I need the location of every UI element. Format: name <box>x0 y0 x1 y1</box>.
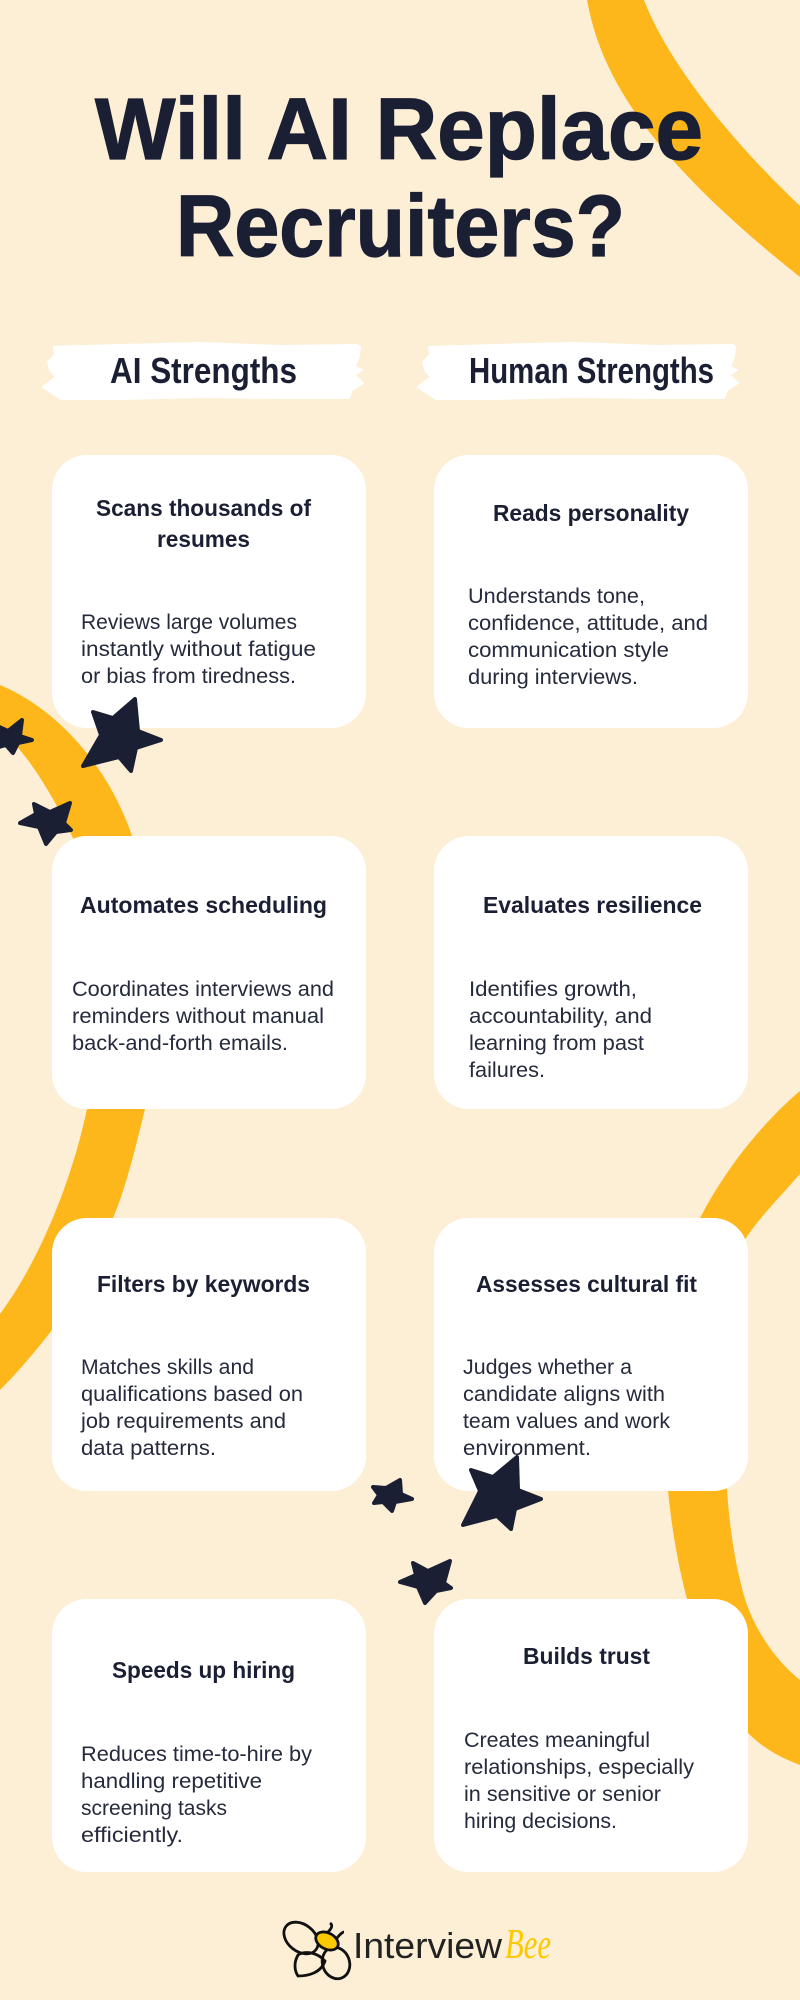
card: Builds trust: Creates meaningful <box>464 1729 650 1752</box>
stars: left group <box>0 699 161 844</box>
card: Filters by keywords: Filters by keywords <box>97 1271 310 1297</box>
card: Reads personality: confidence, attitude, and <box>468 612 708 635</box>
logo: InterviewBee: Bee <box>505 1922 551 1968</box>
card: Evaluates resilience: accountability, and <box>469 1005 652 1028</box>
card: Scans thousands of resumes: Scans thousands of <box>96 495 311 521</box>
card: Assesses cultural fit <box>434 1218 748 1491</box>
card: Scans thousands of resumes: or bias from tiredness. <box>81 665 296 688</box>
title: Will AI Replace <box>95 81 703 178</box>
card: Reads personality: communication style <box>468 639 669 662</box>
card: Filters by keywords <box>52 1218 366 1491</box>
card: Reads personality: Understands tone, <box>468 585 645 608</box>
card: Automates scheduling: back-and-forth emails. <box>72 1032 288 1055</box>
column header: AI Strengths: AI Strengths <box>110 350 297 391</box>
card: Evaluates resilience: Identifies growth, <box>469 978 637 1001</box>
card: Builds trust: relationships, especially <box>464 1756 695 1779</box>
title: Recruiters? <box>176 178 625 275</box>
card: Reads personality: Reads personality <box>493 500 689 526</box>
card: Evaluates resilience: Evaluates resilience <box>483 892 702 918</box>
card: Evaluates resilience: failures. <box>469 1059 545 1082</box>
column header: AI Strengths <box>43 343 363 399</box>
title <box>95 81 703 275</box>
card: Scans thousands of resumes: instantly without fatigue <box>81 638 316 661</box>
card: Builds trust: hiring decisions. <box>464 1810 617 1833</box>
card: Filters by keywords: job requirements and <box>80 1410 286 1433</box>
decorative arc: top right <box>587 0 800 277</box>
card: Assesses cultural fit: Judges whether a <box>463 1356 632 1379</box>
card: Assesses cultural fit: environment. <box>463 1437 591 1460</box>
card: Assesses cultural fit: candidate aligns with <box>463 1383 665 1406</box>
column header: Human Strengths <box>418 343 738 399</box>
card: Assesses cultural fit: Assesses cultural fit <box>476 1271 697 1297</box>
card: Evaluates resilience: learning from past <box>469 1032 644 1055</box>
card: Speeds up hiring <box>52 1599 366 1872</box>
card: Filters by keywords: qualifications based on <box>81 1383 303 1406</box>
decorative arc: left <box>0 685 162 1390</box>
card: Filters by keywords: data patterns. <box>81 1437 216 1460</box>
icon: bee <box>278 1916 354 1983</box>
card: Speeds up hiring: efficiently. <box>81 1824 183 1847</box>
card: Filters by keywords: Matches skills and <box>81 1356 254 1379</box>
card: Speeds up hiring: Reduces time-to-hire by <box>81 1743 313 1766</box>
card: Automates scheduling: reminders without manual <box>72 1005 324 1028</box>
card: Builds trust: in sensitive or senior <box>464 1783 661 1806</box>
logo: InterviewBee: Interview <box>353 1925 503 1966</box>
stars: centre group <box>373 1457 541 1603</box>
column header: Human Strengths: Human Strengths <box>469 350 714 391</box>
card: Automates scheduling: Coordinates interviews and <box>72 978 334 1001</box>
card: Speeds up hiring: Speeds up hiring <box>112 1657 295 1683</box>
card: Speeds up hiring: screening tasks <box>81 1797 227 1820</box>
card: Scans thousands of resumes: Reviews large volumes <box>81 611 297 634</box>
decorative arc: right <box>665 1091 800 1765</box>
card: Automates scheduling: Automates scheduling <box>80 892 327 918</box>
card: Assesses cultural fit: team values and work <box>463 1410 670 1433</box>
card: Automates scheduling <box>52 836 366 1109</box>
card: Builds trust <box>434 1599 748 1872</box>
card: Speeds up hiring: handling repetitive <box>81 1770 262 1793</box>
logo: InterviewBee <box>278 1916 551 1983</box>
card: Reads personality: during interviews. <box>468 666 638 689</box>
card: Evaluates resilience <box>434 836 748 1109</box>
card: Builds trust: Builds trust <box>523 1643 650 1669</box>
card: Scans thousands of resumes <box>52 455 366 728</box>
card: Scans thousands of resumes: resumes <box>157 526 250 552</box>
card: Reads personality <box>434 455 748 728</box>
